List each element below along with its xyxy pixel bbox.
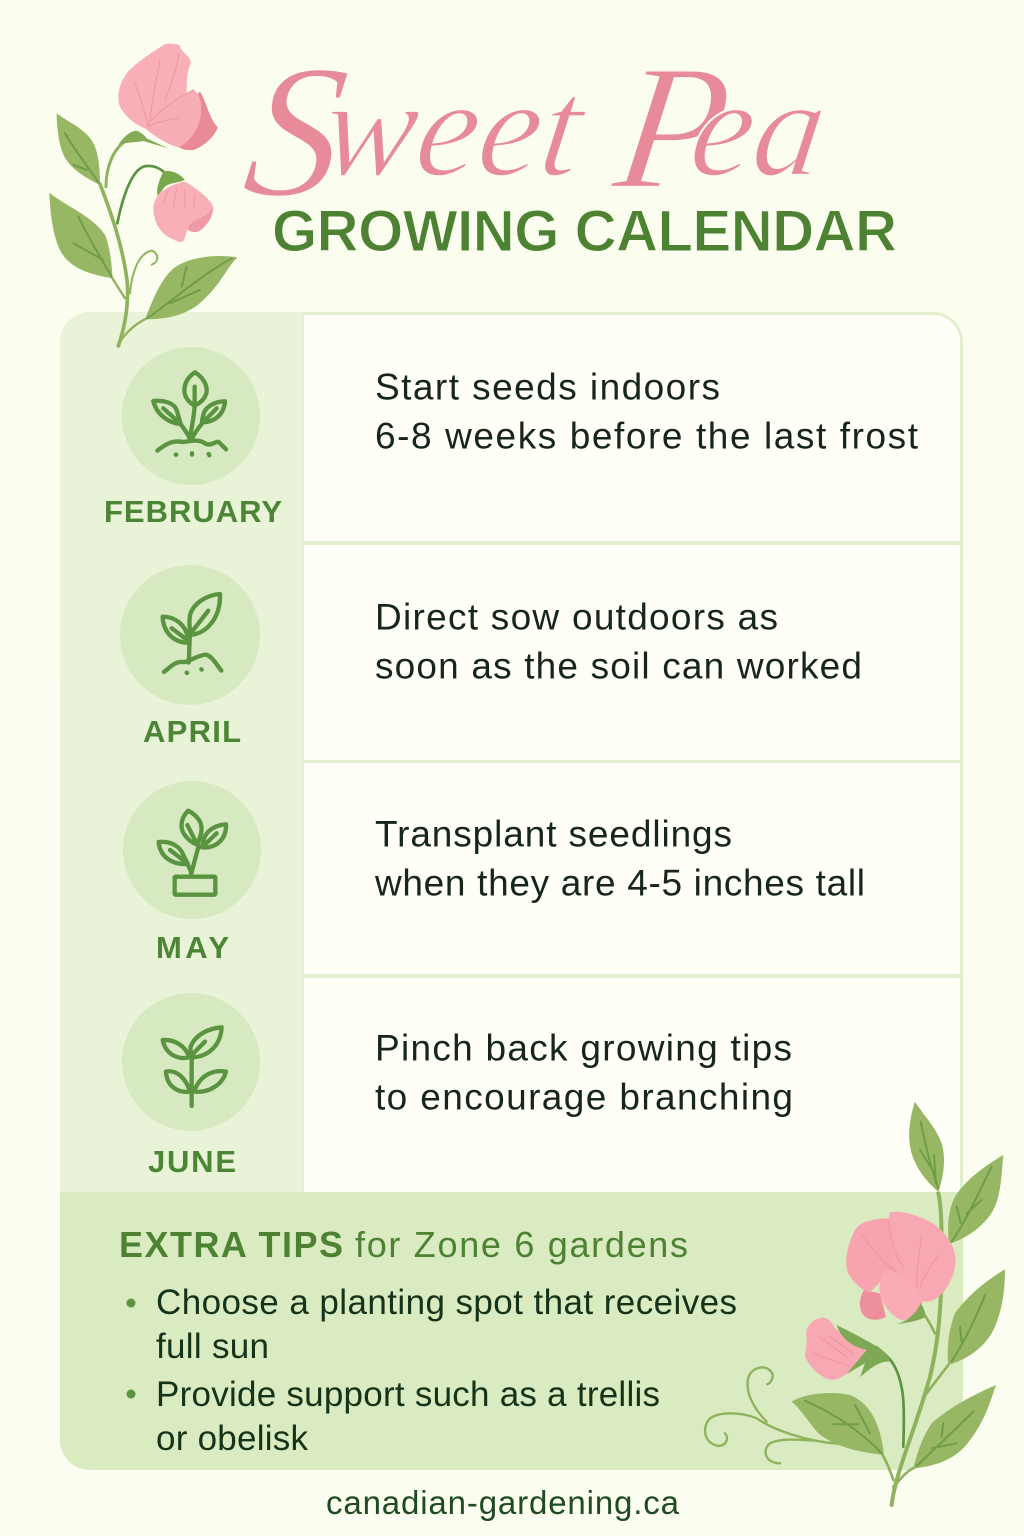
illustration: bottom sweet pea <box>705 1102 1005 1505</box>
tip: support <box>126 1375 660 1458</box>
text: February task: Start seeds indoors <box>375 366 720 408</box>
icon: February sprout <box>122 347 260 485</box>
lower petal <box>145 89 201 147</box>
tendrils <box>705 1413 840 1446</box>
icon: June plant <box>122 993 260 1131</box>
label: February: FEBRUARY <box>104 494 282 529</box>
bud back <box>185 207 213 232</box>
text: June task: to encourage branching <box>375 1076 793 1118</box>
text: April task <box>375 596 862 686</box>
label: May: MAY <box>156 930 229 965</box>
upper petal <box>118 44 191 128</box>
illustration: top sweet pea <box>49 44 237 346</box>
tip: sun: full sun <box>156 1327 269 1366</box>
website: canadian-gardening.ca <box>326 1484 680 1521</box>
bud calyx <box>157 171 185 196</box>
flower front petal <box>880 1270 923 1321</box>
row: February <box>304 315 960 541</box>
panel: calendar <box>60 312 963 1192</box>
flower right petal <box>889 1212 956 1302</box>
label: June: JUNE <box>148 1144 236 1179</box>
flower left petal <box>846 1218 920 1297</box>
bud <box>805 1318 867 1380</box>
title: Sweet Pea: weet <box>314 52 595 206</box>
calyx <box>118 131 168 148</box>
tip: sun: Choose a planting spot that receives <box>156 1283 737 1322</box>
bud calyx <box>837 1325 890 1377</box>
heading: extra tips: EXTRA TIPS <box>119 1224 343 1265</box>
tip: support: or obelisk <box>156 1419 308 1458</box>
calyx of flower <box>897 1303 925 1324</box>
text: May task: Transplant seedlings <box>375 814 732 854</box>
panel: extra tips <box>60 1192 963 1470</box>
text: April task: Direct sow outdoors as <box>375 596 778 638</box>
text: April task: soon as the soil can worked <box>375 646 862 686</box>
heading: extra tips <box>119 1224 688 1265</box>
row: June <box>304 978 960 1192</box>
text: May task <box>374 814 865 904</box>
icon: April seedling <box>120 565 260 705</box>
bud <box>153 182 213 242</box>
icon: May potted plant <box>123 781 261 919</box>
label: April: APRIL <box>143 714 241 749</box>
row: April <box>304 545 960 760</box>
text: June task: Pinch back growing tips <box>375 1028 792 1068</box>
text: February task <box>375 366 919 456</box>
text: June task <box>375 1028 793 1118</box>
tip: support: Provide support such as a trellis <box>156 1375 660 1414</box>
text: February task: 6-8 weeks before the last frost <box>375 416 919 456</box>
row: May <box>304 763 960 974</box>
title: Sweet Pea: P <box>604 29 742 226</box>
stems <box>892 1193 942 1505</box>
title: Sweet Pea: ea <box>682 52 836 206</box>
heading: extra tips: for Zone 6 gardens <box>355 1224 688 1265</box>
title: Sweet Pea: S <box>234 27 358 237</box>
leaves <box>909 1102 944 1192</box>
subtitle: Growing Calendar: GROWING CALENDAR <box>272 199 897 264</box>
back petal <box>177 92 218 150</box>
panel: month column <box>60 312 303 1192</box>
flower back lobe <box>860 1290 886 1320</box>
leaves <box>57 113 100 185</box>
text: May task: when they are 4-5 inches tall <box>374 862 865 904</box>
tip: sun <box>126 1283 737 1366</box>
